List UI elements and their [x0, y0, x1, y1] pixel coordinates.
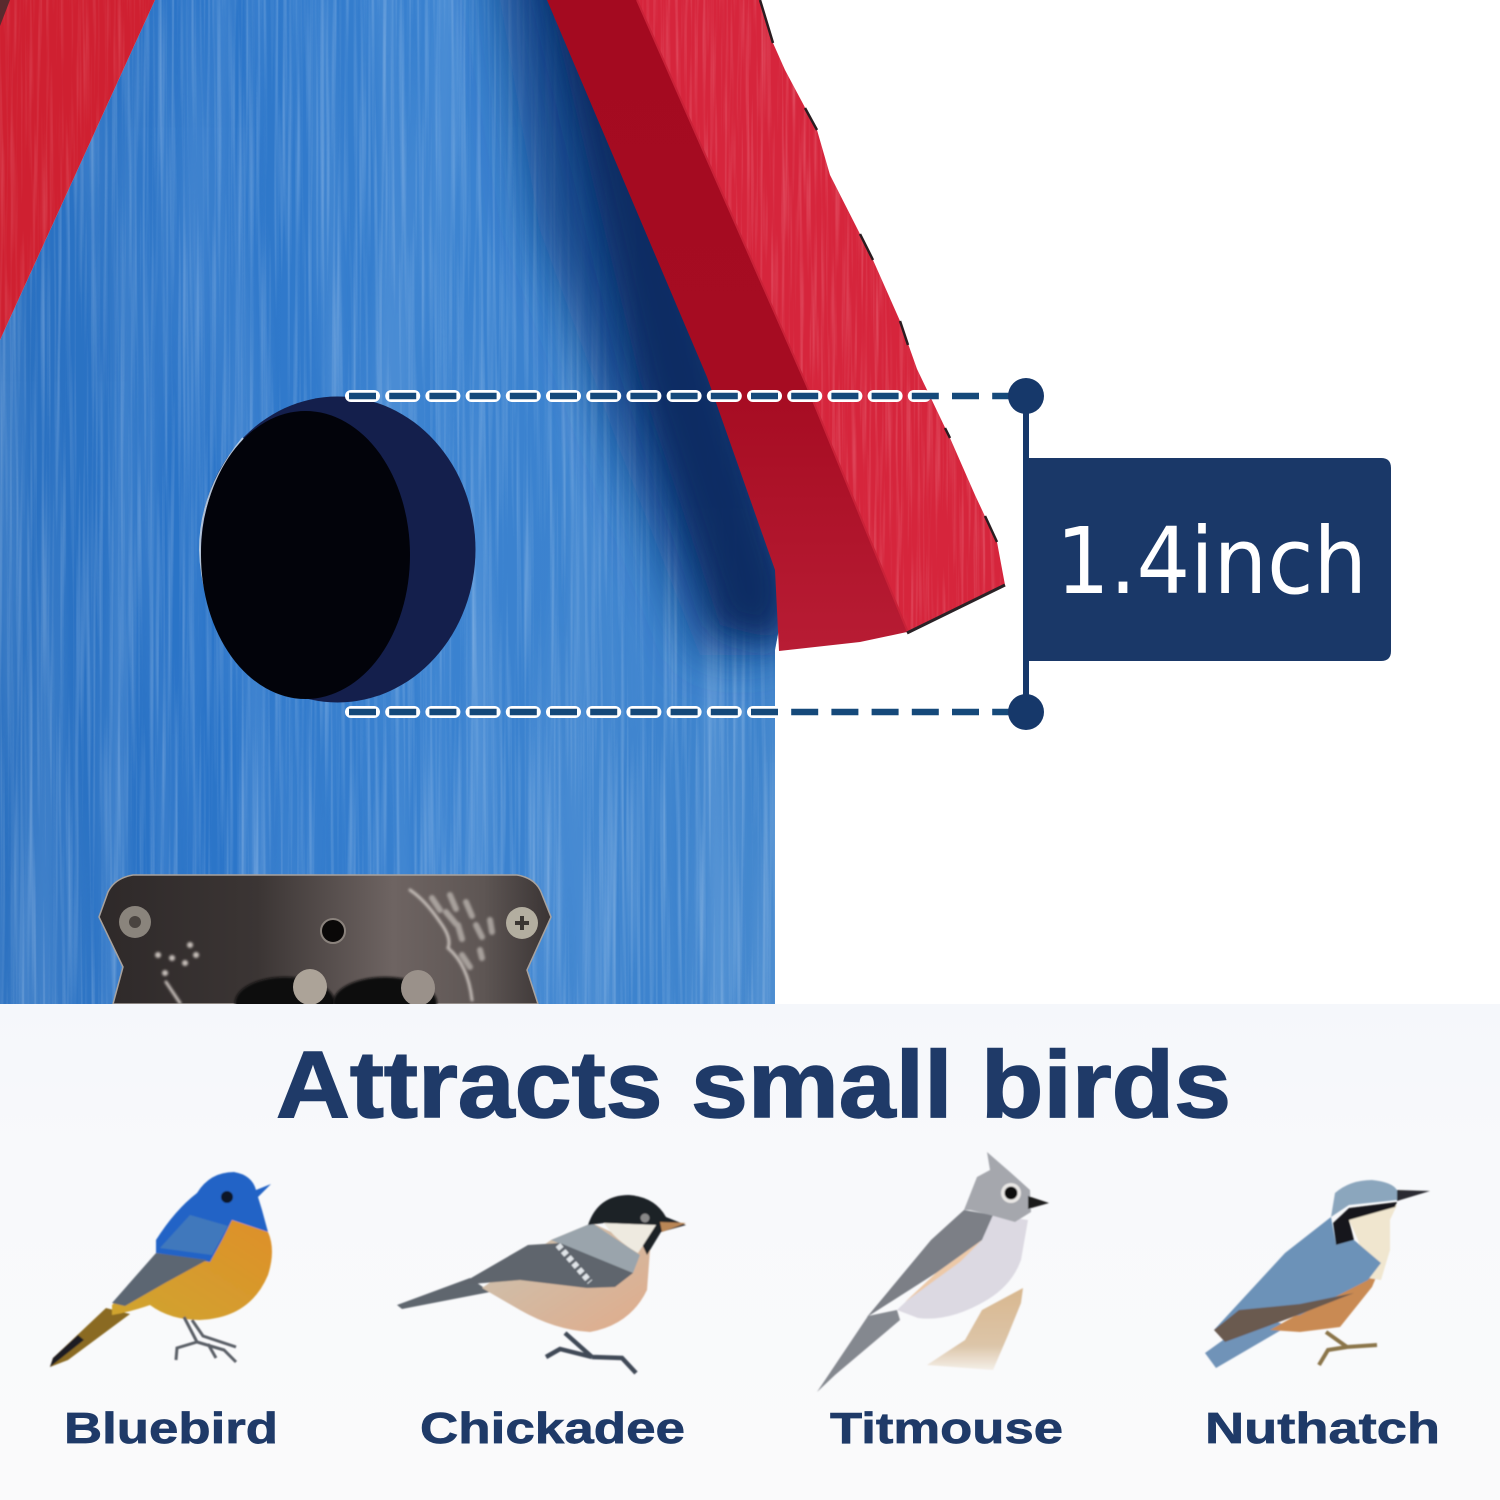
label: titmouse: Titmouse — [830, 1404, 1063, 1453]
label: nuthatch: Nuthatch — [1205, 1404, 1440, 1453]
bird: chickadee — [397, 1195, 686, 1373]
left roof — [0, 0, 160, 345]
roof top face — [637, 0, 1005, 633]
bird: titmouse — [817, 1152, 1049, 1392]
panel: attracts small birds — [0, 1004, 1500, 1500]
dashed guide lines — [349, 396, 1015, 712]
size label: 1.4inch — [1056, 508, 1367, 615]
entrance hole — [200, 396, 476, 702]
size label — [1028, 458, 1391, 661]
right roof — [547, 0, 1010, 651]
house front: blue wood — [0, 0, 800, 1004]
bird: bluebird — [50, 1172, 272, 1367]
label: chickadee: Chickadee — [420, 1404, 685, 1453]
dimension marker — [349, 378, 1391, 730]
bird: nuthatch — [1205, 1180, 1430, 1368]
photo: birdhouse — [0, 0, 1010, 1029]
roof front face — [547, 0, 907, 651]
label: bluebird: Bluebird — [64, 1404, 278, 1453]
metal plate — [99, 875, 551, 1029]
heading: Attracts small birds — [276, 1032, 1231, 1138]
branch — [927, 1288, 1023, 1370]
